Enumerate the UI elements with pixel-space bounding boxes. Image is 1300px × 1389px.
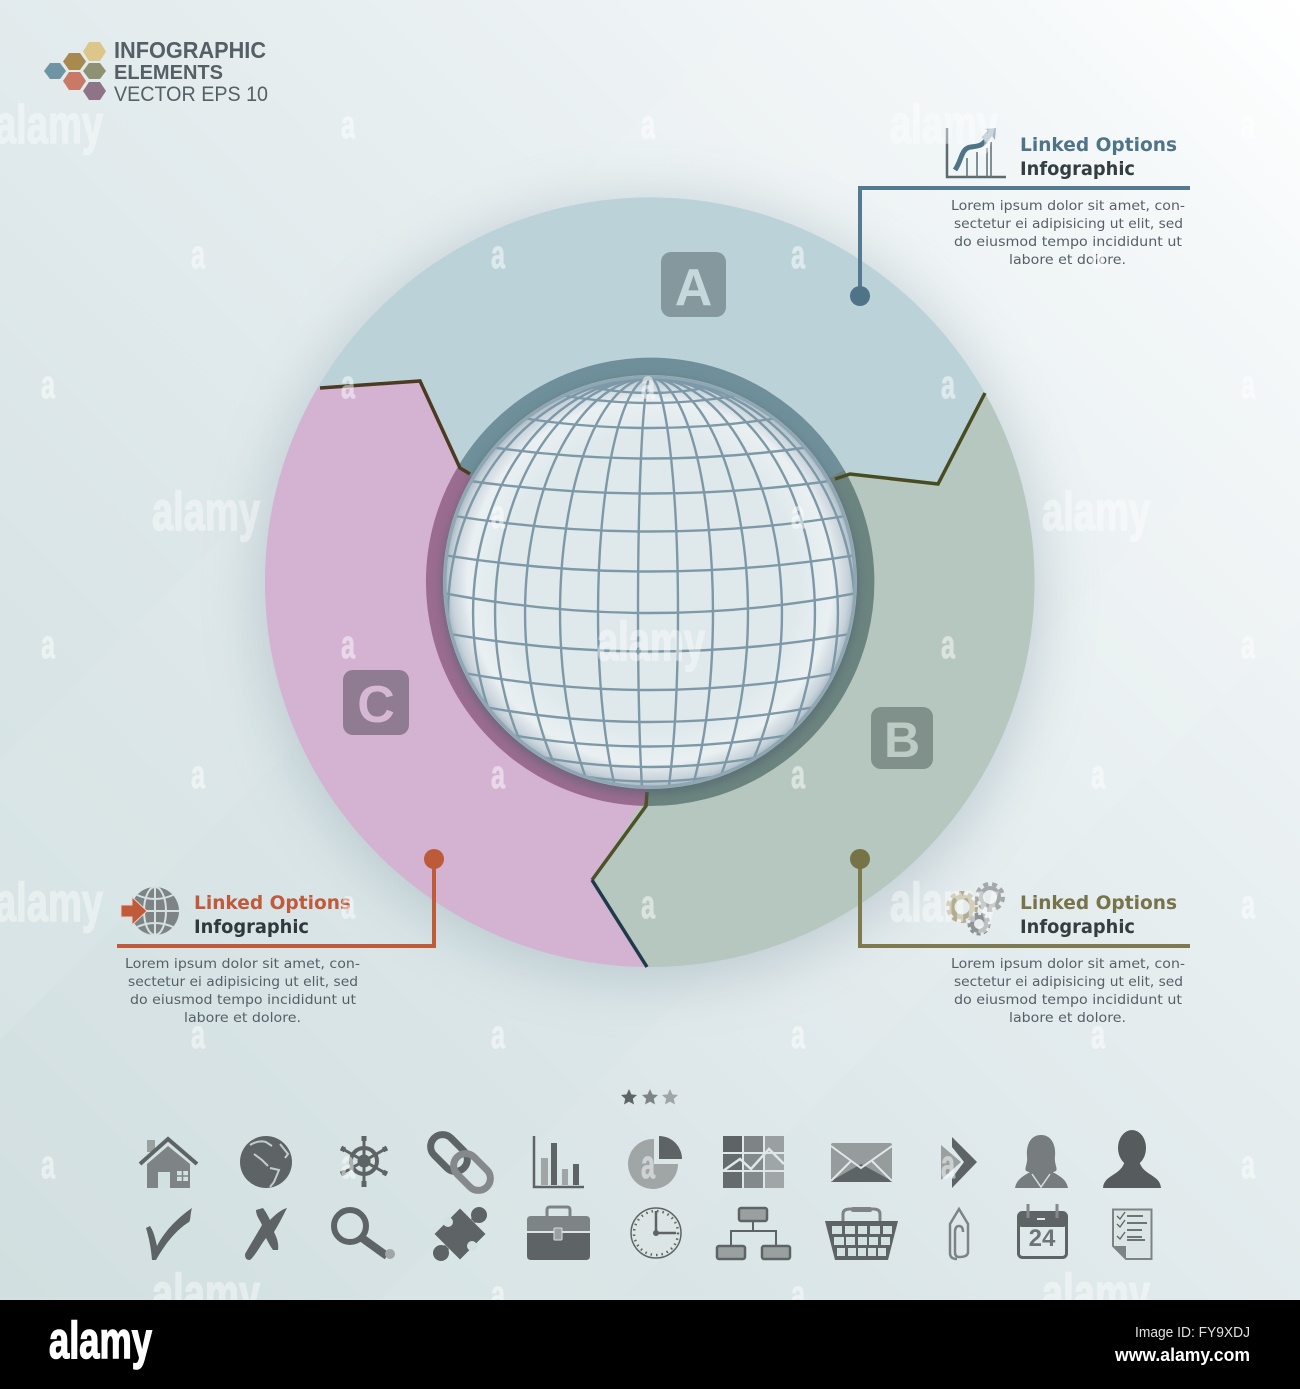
- watermarks: alamy: [152, 1262, 260, 1324]
- watermarks: a: [1091, 233, 1105, 277]
- icon: woman: [1015, 1135, 1068, 1188]
- dot A: [850, 286, 870, 306]
- body A: labore et dolore.: [1009, 252, 1126, 268]
- heading C: Linked Options: [194, 892, 351, 914]
- segment C: [265, 381, 650, 967]
- footer logo: alamy: [49, 1312, 152, 1370]
- icon: gears: [948, 884, 1003, 934]
- wireframe globe: [443, 375, 857, 789]
- watermarks: a: [41, 1143, 55, 1187]
- watermarks: a: [491, 493, 505, 537]
- connector A: [860, 188, 1190, 296]
- icon: ship wheel: [341, 1136, 387, 1187]
- footer bar: [0, 1300, 1300, 1389]
- icon: table with trend line: [723, 1136, 784, 1188]
- icon: check mark: [146, 1208, 192, 1260]
- icon: cross mark: [245, 1208, 287, 1260]
- watermarks: a: [341, 623, 355, 667]
- inner ring: [436, 368, 864, 796]
- watermarks: a: [191, 753, 205, 797]
- divider bottom: [592, 880, 647, 967]
- watermarks: a: [1241, 363, 1255, 407]
- badge A: A: [675, 259, 712, 317]
- watermarks: alamy: [890, 871, 998, 933]
- watermarks: a: [491, 753, 505, 797]
- watermarks: a: [641, 363, 655, 407]
- icon: calendar: [1018, 1204, 1067, 1258]
- icon: chevrons: [941, 1137, 977, 1188]
- watermarks: alamy: [1042, 480, 1150, 542]
- icon: clock: [631, 1208, 681, 1258]
- heading B: Linked Options: [1020, 892, 1177, 914]
- icon: man: [1103, 1130, 1161, 1188]
- watermarks: a: [341, 1143, 355, 1187]
- watermarks: a: [491, 1273, 505, 1317]
- callout B: [850, 849, 1190, 1026]
- watermarks: alamy: [1042, 1262, 1150, 1324]
- watermarks: a: [1091, 1013, 1105, 1057]
- icon: calendar: 24: [1029, 1225, 1056, 1252]
- body C: labore et dolore.: [184, 1010, 301, 1026]
- body A: Lorem ipsum dolor sit amet, con-: [951, 198, 1185, 214]
- watermarks: a: [191, 233, 205, 277]
- watermarks: a: [1241, 883, 1255, 927]
- icon: paper clip: [950, 1209, 968, 1259]
- body C: Lorem ipsum dolor sit amet, con-: [125, 956, 360, 972]
- watermarks: a: [641, 1143, 655, 1187]
- watermarks: a: [791, 1013, 805, 1057]
- connector C: [117, 859, 434, 946]
- badge C: [343, 670, 409, 735]
- watermarks: a: [941, 1143, 955, 1187]
- body B: do eiusmod tempo incididunt ut: [954, 992, 1182, 1008]
- watermarks: a: [791, 233, 805, 277]
- circular diagram: [258, 197, 1042, 982]
- watermarks: a: [641, 883, 655, 927]
- icon: chain link: [426, 1130, 495, 1195]
- body B: [951, 956, 1185, 1026]
- watermarks: a: [1091, 753, 1105, 797]
- watermarks: a: [1241, 103, 1255, 147]
- subheading A: Infographic: [1020, 158, 1135, 180]
- logo text: VECTOR EPS 10: [114, 83, 268, 106]
- icon: puzzle piece: [433, 1207, 487, 1261]
- body B: sectetur ei adipisicing ut elit, sed: [954, 974, 1183, 990]
- stars: [621, 1089, 678, 1104]
- watermarks: a: [641, 103, 655, 147]
- watermarks: a: [791, 493, 805, 537]
- icon: earth: [240, 1136, 292, 1188]
- logo hexagons: [44, 42, 106, 100]
- heading A: Linked Options: [1020, 134, 1177, 156]
- icon: shopping basket: [825, 1207, 898, 1260]
- icon: growth chart: [947, 128, 1006, 177]
- watermarks: a: [491, 1013, 505, 1057]
- logo: [44, 37, 268, 106]
- divider between A and B: [835, 393, 985, 484]
- icon: globe with arrow: [121, 887, 179, 935]
- watermarks: a: [491, 233, 505, 277]
- body A: [951, 198, 1185, 268]
- callout A: [850, 128, 1190, 306]
- badge C: C: [357, 676, 395, 734]
- body A: sectetur ei adipisicing ut elit, sed: [954, 216, 1183, 232]
- watermarks: a: [1241, 623, 1255, 667]
- logo text: ELEMENTS: [114, 62, 223, 84]
- icon: org chart: [717, 1208, 790, 1259]
- watermarks: a: [341, 883, 355, 927]
- watermarks: a: [1241, 1143, 1255, 1187]
- icon: house: [140, 1139, 197, 1189]
- subheading C: Infographic: [194, 916, 309, 938]
- icon: bar chart: [534, 1136, 584, 1187]
- watermarks: a: [41, 363, 55, 407]
- segment A: [318, 197, 985, 582]
- badge B: B: [884, 712, 920, 768]
- connector B: [860, 859, 1190, 946]
- dot C: [424, 849, 444, 869]
- watermarks: a: [941, 363, 955, 407]
- watermarks: alamy: [597, 610, 705, 672]
- body C: [125, 956, 360, 1026]
- icon: briefcase: [527, 1207, 590, 1260]
- icon: checklist: [1113, 1210, 1152, 1259]
- body A: do eiusmod tempo incididunt ut: [954, 234, 1182, 250]
- body B: labore et dolore.: [1009, 1010, 1126, 1026]
- divider between C and A: [320, 381, 470, 474]
- callout C: [117, 849, 444, 1026]
- badge B: [871, 707, 933, 769]
- watermarks: a: [191, 1013, 205, 1057]
- icon: magnifier: [334, 1210, 395, 1259]
- watermarks: a: [341, 363, 355, 407]
- logo text: INFOGRAPHIC: [114, 37, 266, 63]
- image id: Image ID: FY9XDJ: [1135, 1324, 1250, 1341]
- icon: envelope: [831, 1143, 892, 1182]
- watermarks: alamy: [890, 93, 998, 155]
- watermarks: a: [341, 103, 355, 147]
- dot B: [850, 849, 870, 869]
- watermarks: a: [791, 753, 805, 797]
- logo text: [114, 37, 268, 106]
- subheading B: Infographic: [1020, 916, 1135, 938]
- segment B: [592, 393, 1035, 967]
- divider between B and C: [592, 792, 647, 880]
- badge A: [661, 252, 726, 317]
- website: www.alamy.com: [1114, 1345, 1250, 1365]
- watermarks: a: [41, 623, 55, 667]
- watermarks: a: [941, 623, 955, 667]
- watermarks: a: [791, 1273, 805, 1317]
- body C: sectetur ei adipisicing ut elit, sed: [128, 974, 358, 990]
- body C: do eiusmod tempo incididunt ut: [130, 992, 356, 1008]
- watermarks: alamy: [152, 480, 260, 542]
- body B: Lorem ipsum dolor sit amet, con-: [951, 956, 1185, 972]
- icon: pie chart: [628, 1136, 682, 1189]
